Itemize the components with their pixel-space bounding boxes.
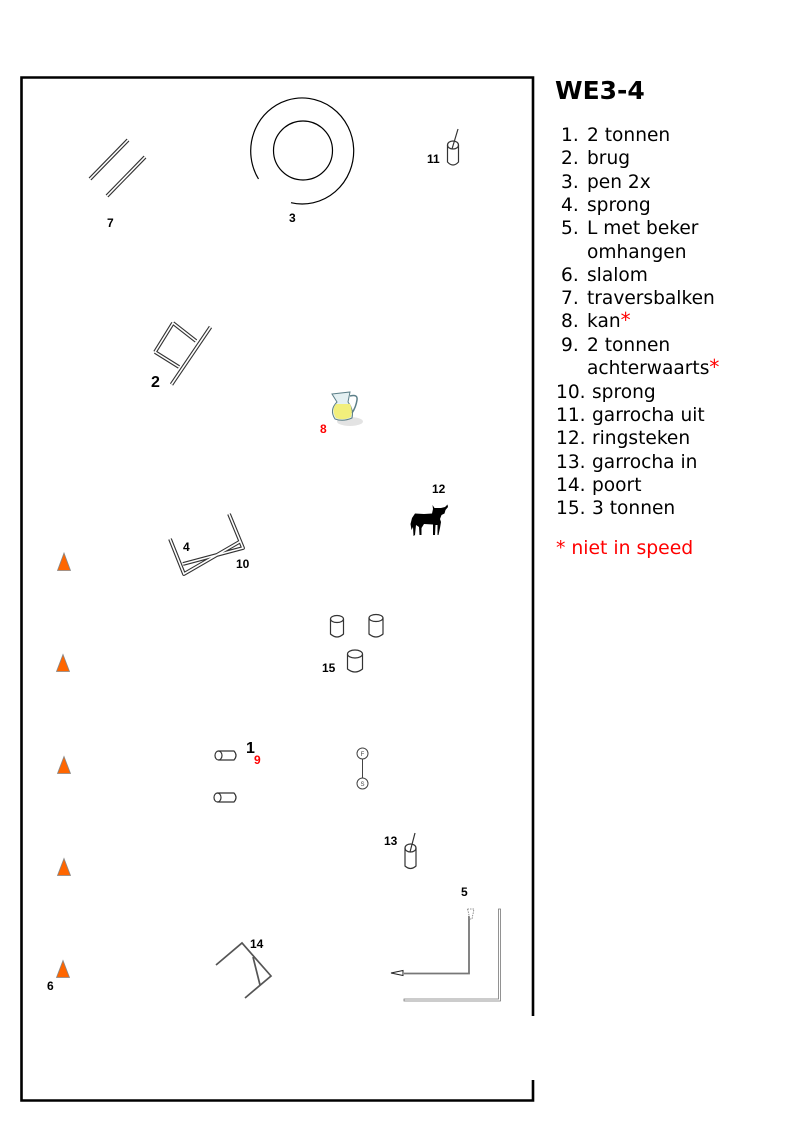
start and finish marker: F — [361, 752, 365, 758]
obstacle list: 2. — [561, 148, 579, 169]
obstacle list: 13. — [556, 452, 586, 473]
obstacle list: sprong — [587, 195, 651, 216]
obstacle 7: traversbalken: 7 — [107, 216, 114, 230]
obstacle 7: traversbalken — [90, 140, 145, 230]
obstacle list: 2 tonnen — [587, 125, 670, 146]
obstacle 11: garrocha uit: 11 — [427, 152, 440, 166]
obstacle list: sprong — [592, 382, 656, 403]
obstacle list: L met beker — [587, 218, 699, 239]
obstacle 14: poort: 14 — [250, 937, 264, 951]
obstacle 1 and 9: 2 tonnen: 9 — [254, 753, 261, 767]
icon: cone — [56, 654, 70, 672]
obstacle 5: L met beker omhangen: 5 — [461, 885, 468, 899]
obstacle list: 8. — [561, 311, 579, 332]
obstacle list: garrocha uit — [592, 405, 705, 426]
obstacle 4 and 10: sprong: 10 — [236, 557, 250, 571]
obstacle list: 7. — [561, 288, 579, 309]
obstacle list: brug — [587, 148, 630, 169]
obstacle 2: brug — [151, 323, 210, 391]
obstacle 11: garrocha uit — [427, 129, 458, 166]
obstacle list: 9. — [561, 335, 579, 356]
footnote: * niet in speed — [556, 538, 693, 559]
obstacle list: 3. — [561, 172, 579, 193]
obstacle list: 15. — [556, 498, 586, 519]
obstacle list: 4. — [561, 195, 579, 216]
obstacle list: garrocha in — [592, 452, 697, 473]
icon: cone — [58, 756, 70, 774]
obstacle list: poort — [592, 475, 642, 496]
obstacle 5: L met beker omhangen — [391, 885, 500, 1001]
obstacle list: ringsteken — [592, 428, 690, 449]
obstacle list: achterwaarts* — [587, 355, 719, 379]
obstacle 8: kan: 8 — [320, 422, 327, 436]
obstacle list: 14. — [556, 475, 586, 496]
obstacle 3: pen 2x: 3 — [289, 211, 296, 225]
obstacle list: kan* — [587, 308, 631, 332]
obstacle list: 2 tonnen — [587, 335, 670, 356]
course frame — [22, 78, 533, 1100]
obstacle 13: garrocha in: 13 — [384, 834, 398, 848]
obstacle 8: kan — [320, 392, 363, 436]
obstacle 4 and 10: sprong — [170, 514, 250, 574]
obstacle list: pen 2x — [587, 172, 651, 193]
obstacle 12: ringsteken — [410, 482, 448, 536]
obstacle list — [556, 125, 719, 519]
obstacle list: 12. — [556, 428, 586, 449]
start and finish marker: S — [360, 782, 365, 788]
obstacle list: 5. — [561, 218, 579, 239]
obstacle 15: 3 tonnen: 15 — [322, 661, 336, 675]
icon: cone — [58, 858, 70, 876]
obstacle list: omhangen — [587, 242, 686, 263]
obstacle 1 and 9: 2 tonnen: 1 — [246, 740, 255, 757]
icon: cone — [56, 960, 70, 978]
obstacle 12: ringsteken: 12 — [432, 482, 446, 496]
obstacle 15: 3 tonnen — [322, 614, 383, 675]
title: WE3-4 — [555, 76, 645, 105]
obstacle 1 and 9: 2 tonnen — [214, 740, 261, 802]
obstacle list: 3 tonnen — [592, 498, 675, 519]
obstacle list: 1. — [561, 125, 579, 146]
obstacle 2: brug: 2 — [151, 374, 160, 391]
obstacle 13: garrocha in — [384, 833, 416, 868]
obstacle list: 6. — [561, 265, 579, 286]
obstacle 3: pen 2x — [251, 98, 354, 225]
obstacle 14: poort — [216, 937, 271, 998]
obstacle 4 and 10: sprong: 4 — [183, 540, 190, 554]
obstacle list: traversbalken — [587, 288, 715, 309]
obstacle list: 10. — [556, 382, 586, 403]
obstacle list: slalom — [587, 265, 648, 286]
slalom cones — [47, 553, 70, 993]
icon: cone — [58, 553, 70, 570]
slalom cones: 6 — [47, 979, 54, 993]
obstacle list: 11. — [556, 405, 586, 426]
start and finish marker — [357, 748, 368, 789]
